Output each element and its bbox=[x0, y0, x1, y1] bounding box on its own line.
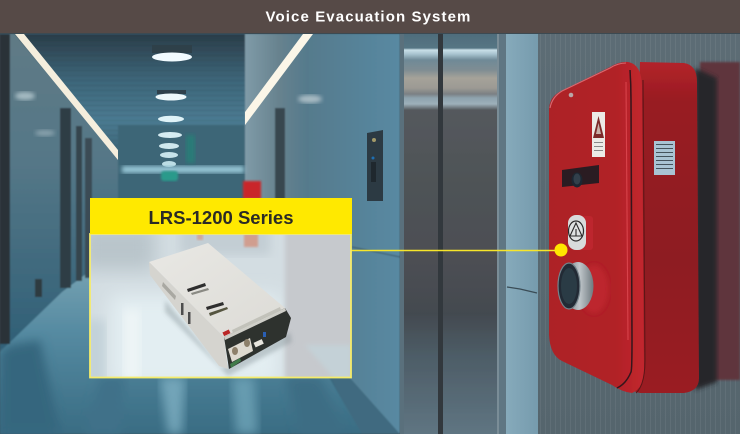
corridor background photo bbox=[0, 33, 400, 434]
title: Voice Evacuation System bbox=[266, 8, 471, 26]
product callout bbox=[80, 198, 360, 385]
ribbed metal wall bbox=[538, 34, 740, 434]
call panel on wall bbox=[367, 130, 383, 201]
warning label bbox=[592, 112, 605, 157]
callout heading: LRS-1200 Series bbox=[148, 207, 294, 228]
power supply unit bbox=[149, 243, 292, 376]
spec label bbox=[654, 141, 675, 175]
concrete pillar bbox=[506, 34, 538, 434]
header bar bbox=[0, 0, 740, 33]
red alarm cabinet bbox=[549, 62, 699, 393]
elevator doors bbox=[400, 34, 506, 434]
callout panel bbox=[90, 234, 351, 378]
callout heading bbox=[90, 198, 352, 234]
connector line with yellow dot bbox=[351, 244, 568, 256]
push button bbox=[568, 215, 593, 250]
round metal speaker bbox=[558, 262, 608, 313]
ceiling lights bbox=[15, 34, 313, 167]
black strip with lens bbox=[562, 165, 599, 188]
